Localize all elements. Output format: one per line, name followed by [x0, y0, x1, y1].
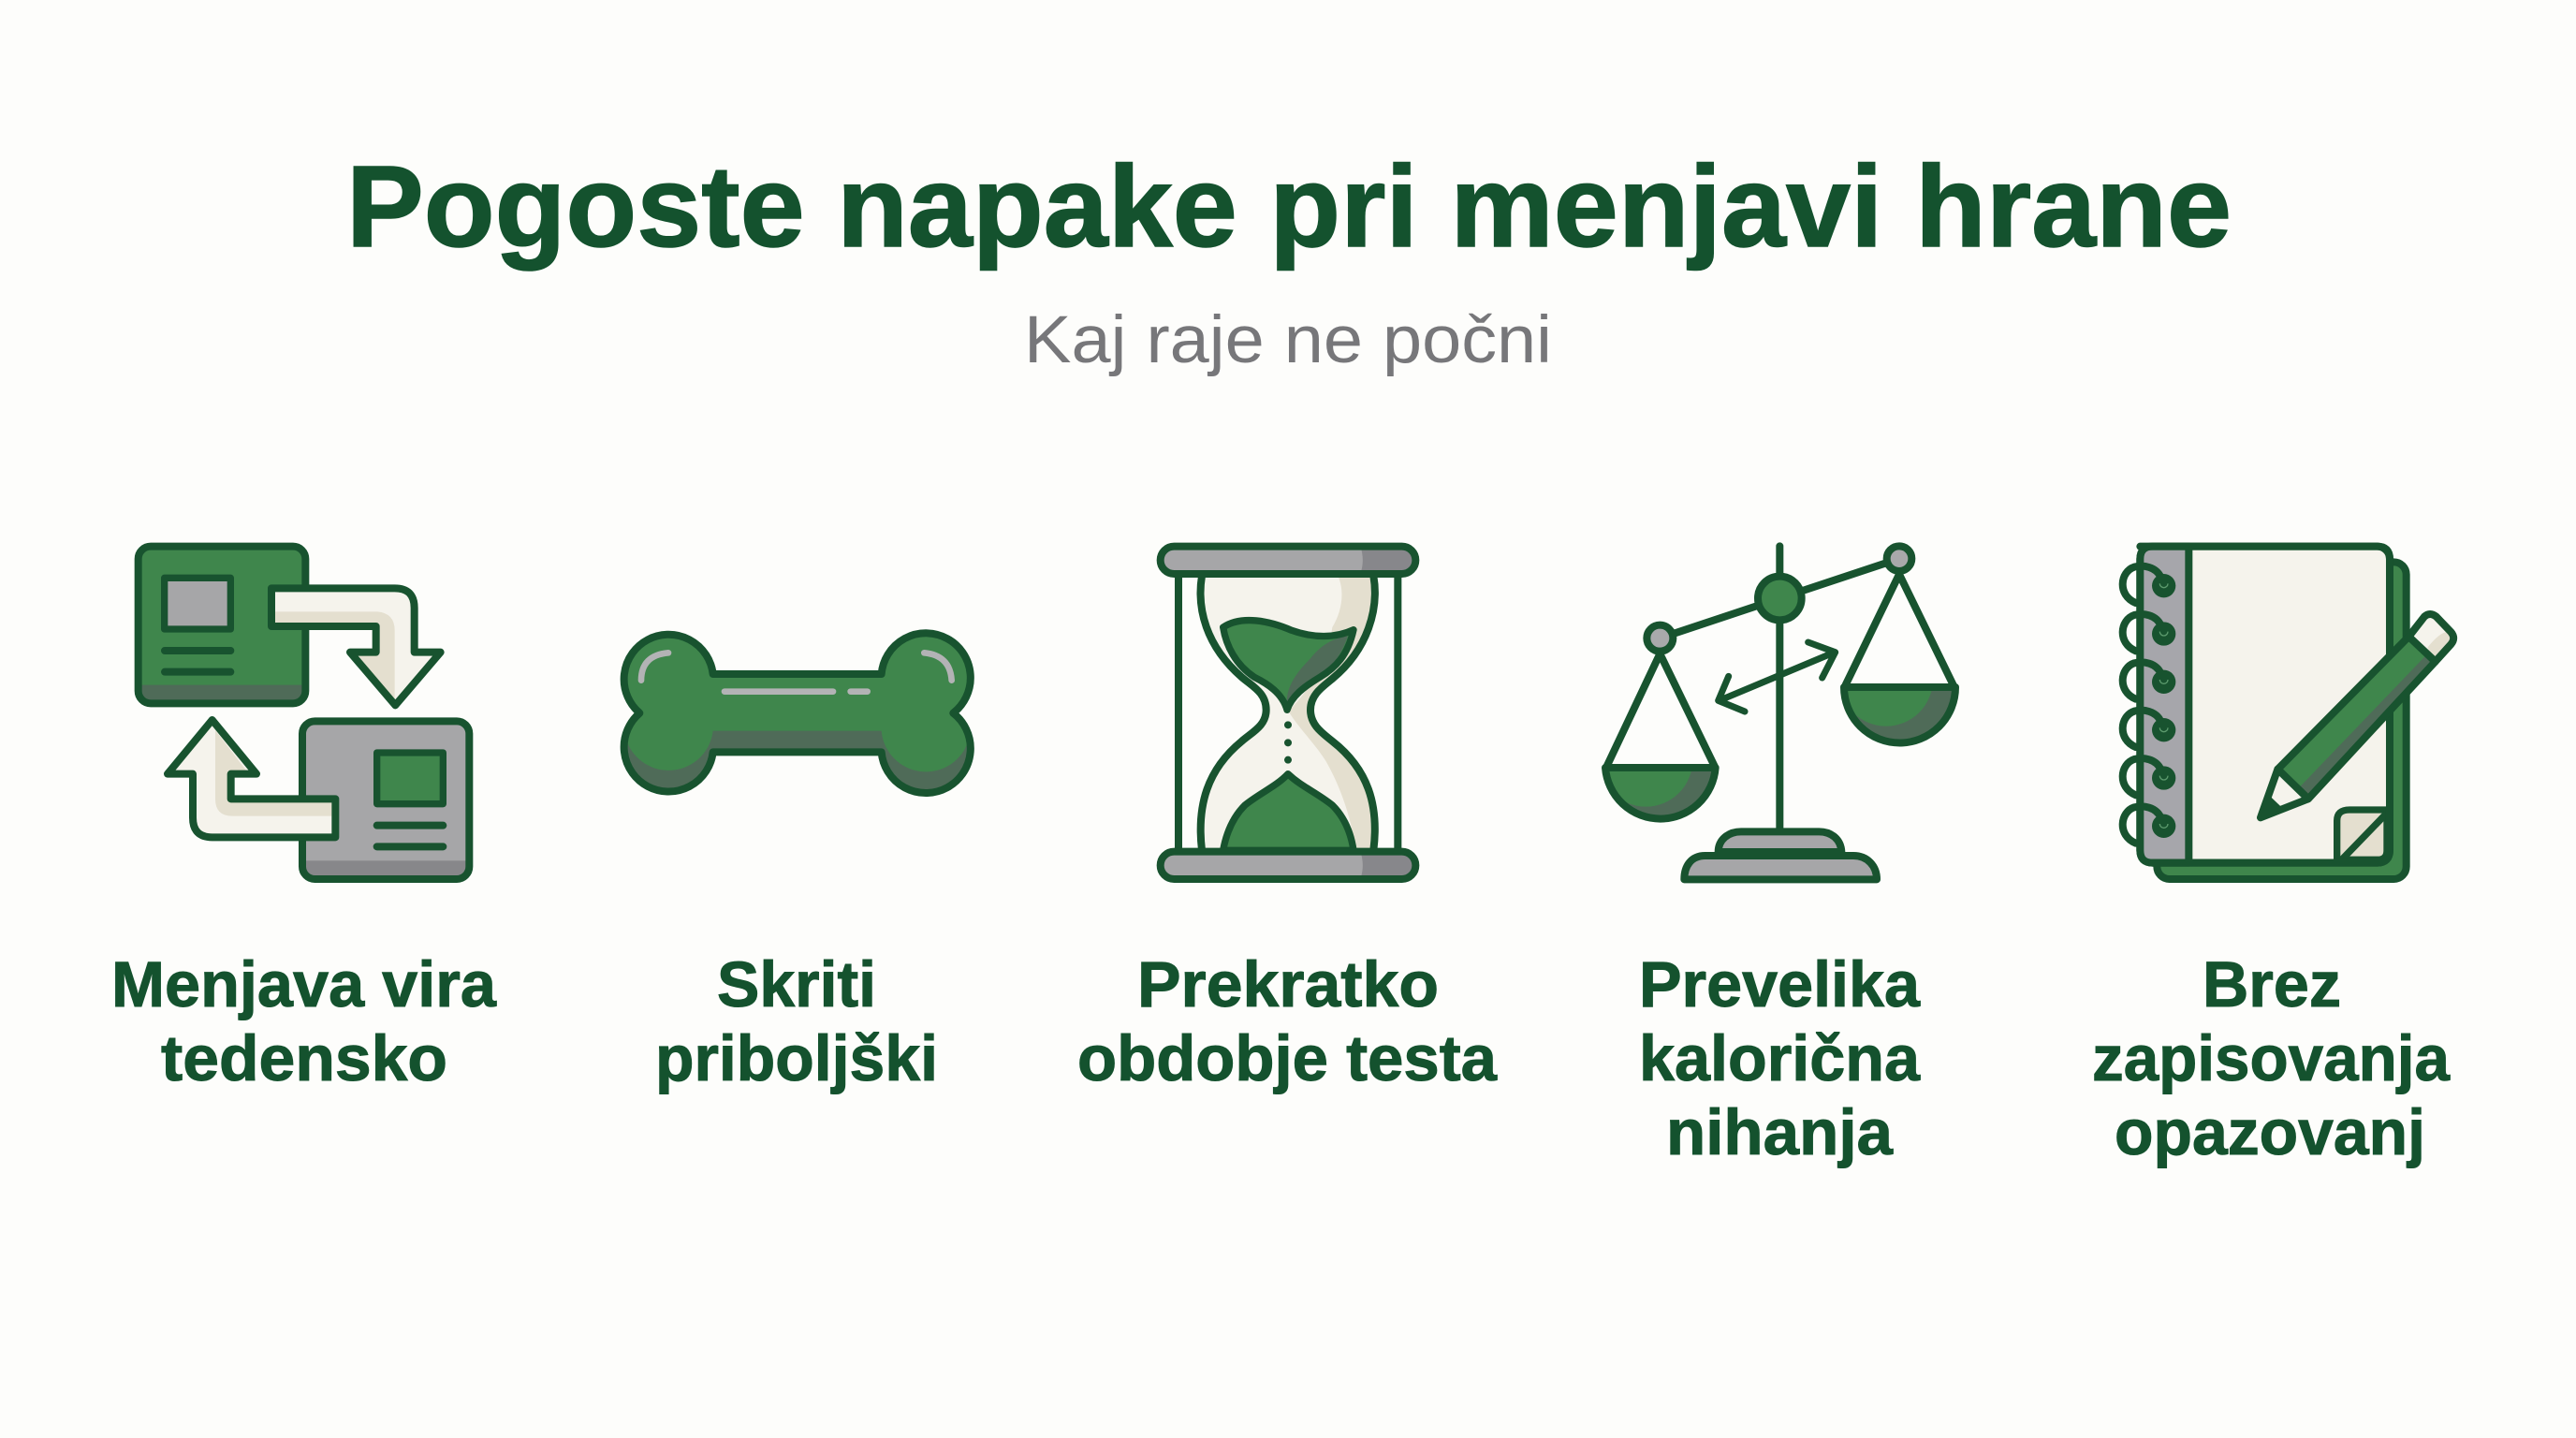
- label: prekratko obdobje testa: [1077, 948, 1498, 1094]
- label: brez zapisovanja opazovanj: zapisovanja: [2092, 1022, 2451, 1094]
- label: skriti priboljski: [655, 948, 938, 1094]
- icon: hourglass: [1161, 547, 1415, 879]
- icon: bone: [620, 629, 974, 797]
- panel: skriti priboljski: [620, 629, 974, 1094]
- label: prevelika kaloricna nihanja: kalorična: [1639, 1022, 1921, 1094]
- label: menjava vira tedensko: tedensko: [161, 1022, 447, 1094]
- label: skriti priboljski: Skriti: [717, 948, 876, 1020]
- label: prevelika kaloricna nihanja: nihanja: [1666, 1096, 1894, 1168]
- label: prevelika kaloricna nihanja: [1639, 948, 1921, 1168]
- label: brez zapisovanja opazovanj: Brez: [2203, 948, 2341, 1020]
- panel: brez zapisovanja opazovanj: [2092, 547, 2453, 1168]
- subtitle: Kaj raje ne počni: [1024, 303, 1552, 377]
- label: menjava vira tedensko: Menjava vira: [111, 948, 497, 1020]
- label: brez zapisovanja opazovanj: opazovanj: [2115, 1096, 2425, 1168]
- title: Pogoste napake pri menjavi hrane: [346, 143, 2232, 271]
- label: brez zapisovanja opazovanj: [2092, 948, 2451, 1168]
- label: prekratko obdobje testa: obdobje testa: [1077, 1022, 1498, 1094]
- panel: menjava vira tedensko: [111, 547, 497, 1094]
- panel: prevelika kaloricna nihanja: [1598, 546, 1963, 1168]
- label: prevelika kaloricna nihanja: Prevelika: [1639, 948, 1921, 1020]
- icon: swapping food sources: [139, 547, 469, 879]
- label: prekratko obdobje testa: Prekratko: [1137, 948, 1439, 1020]
- icon: notebook and pencil: [2123, 547, 2453, 879]
- icon: balance scale: [1598, 546, 1963, 879]
- label: menjava vira tedensko: [111, 948, 497, 1094]
- panel: prekratko obdobje testa: [1077, 547, 1498, 1094]
- label: skriti priboljski: priboljški: [655, 1022, 938, 1094]
